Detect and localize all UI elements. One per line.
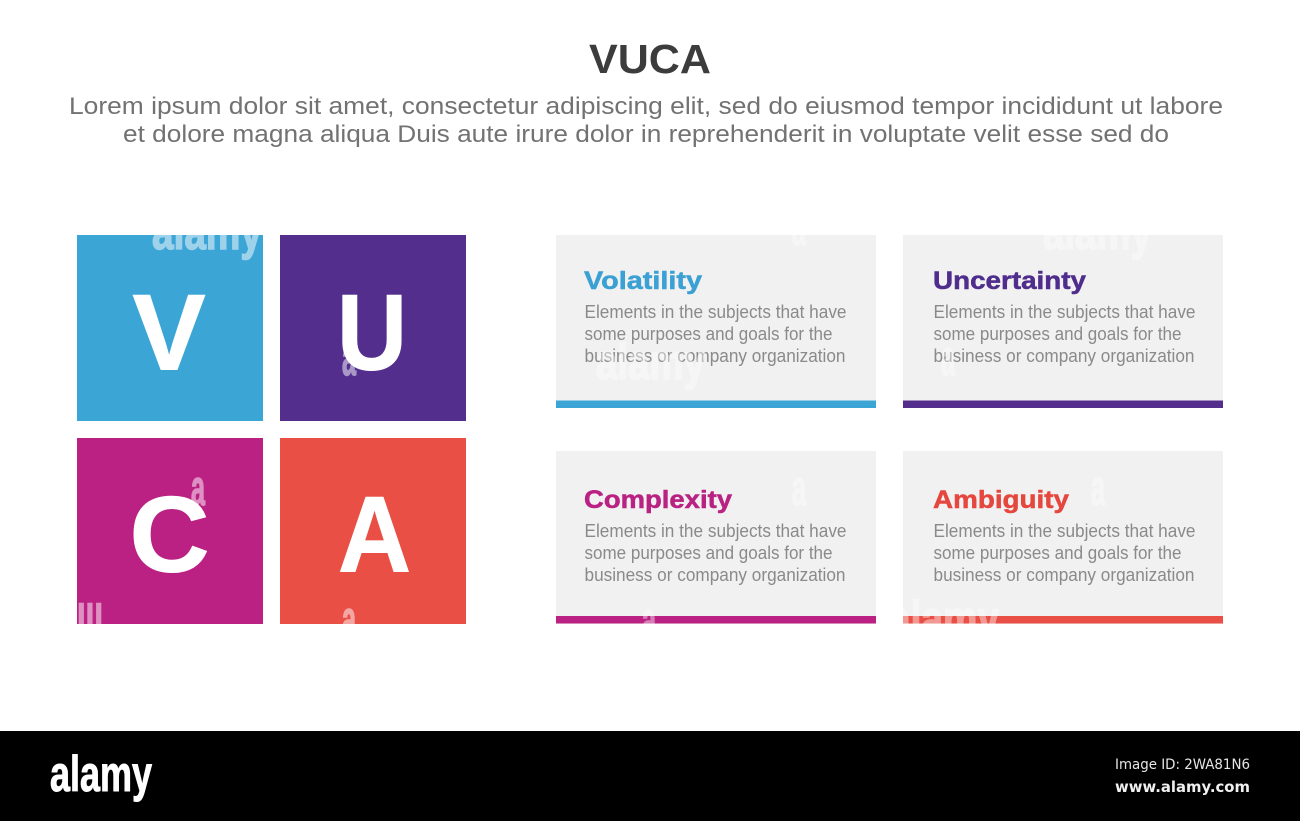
watermark overlay: cards: a (941, 330, 956, 386)
tile: C (77, 438, 263, 624)
body text: Uncertainty: some purposes and goals for the (934, 324, 1182, 344)
body text: Complexity: Elements in the subjects that have (584, 521, 846, 541)
title: VUCA (589, 36, 711, 82)
heading: Volatility: Volatility (584, 267, 702, 295)
tile: V: V (132, 272, 206, 392)
subtitle text block (69, 93, 1223, 148)
heading: Ambiguity: Ambiguity (933, 486, 1069, 514)
watermark overlay: tiles (77, 204, 357, 651)
card: Complexity (556, 451, 876, 624)
watermark overlay: cards: alamy (889, 591, 999, 647)
watermark overlay: cards (596, 200, 1152, 648)
heading: Uncertainty: Uncertainty (933, 267, 1086, 295)
body text: Volatility: some purposes and goals for the (584, 324, 832, 344)
body text: Ambiguity: some purposes and goals for the (934, 543, 1182, 563)
watermark overlay: tiles: a (191, 460, 206, 516)
watermark overlay: tiles: a (342, 591, 357, 647)
image id: Image ID: 2WA81N6 (1115, 757, 1250, 773)
tile: U (280, 235, 466, 421)
subtitle text block: et dolore magna aliqua Duis aute irure dolor in reprehenderit in voluptate velit esse sed do (123, 121, 1169, 148)
body text: Complexity: some purposes and goals for the (584, 543, 832, 563)
body text: Ambiguity (934, 521, 1196, 585)
tile: U: U (337, 272, 407, 392)
body text: Uncertainty (934, 302, 1196, 366)
watermark overlay: tiles: a (342, 330, 357, 386)
card: Ambiguity (903, 451, 1223, 624)
body text: Complexity: business or company organization (584, 565, 846, 585)
watermark overlay: cards: alamy (1043, 204, 1152, 260)
body text: Ambiguity: Elements in the subjects that have (934, 521, 1196, 541)
tile: A: A (338, 474, 411, 594)
card: Uncertainty (903, 235, 1223, 408)
tile: A (280, 438, 466, 624)
tile: V (77, 235, 263, 421)
watermark overlay: cards: a (1091, 460, 1106, 516)
body text: Ambiguity: business or company organization (934, 565, 1194, 585)
card: Volatility (556, 235, 876, 408)
watermark overlay: cards: alamy (596, 334, 705, 390)
body text: Uncertainty: business or company organization (934, 346, 1194, 366)
body text: Volatility (584, 302, 846, 366)
watermark overlay: cards: a (642, 592, 657, 648)
body text: Uncertainty: Elements in the subjects that have (934, 302, 1196, 322)
tile: C: C (130, 474, 210, 594)
body text: Complexity (584, 521, 846, 585)
panel: VUCA letter matrix (77, 235, 466, 624)
subtitle text block: Lorem ipsum dolor sit amet, consectetur adipiscing elit, sed do eiusmod tempor incididunt ut labore (69, 93, 1223, 120)
watermark overlay: tiles: lll (77, 595, 103, 651)
website: www.alamy.com (1115, 778, 1250, 796)
watermark overlay: cards: a (792, 200, 807, 256)
body text: Volatility: business or company organization (584, 346, 846, 366)
body text: Volatility: Elements in the subjects that have (584, 302, 846, 322)
logo: alamy: alamy (50, 746, 152, 802)
watermark overlay: tiles: alamy (152, 204, 262, 260)
heading: Complexity: Complexity (584, 486, 732, 514)
watermark overlay: cards: a (792, 460, 807, 516)
footer bar (0, 731, 1300, 821)
